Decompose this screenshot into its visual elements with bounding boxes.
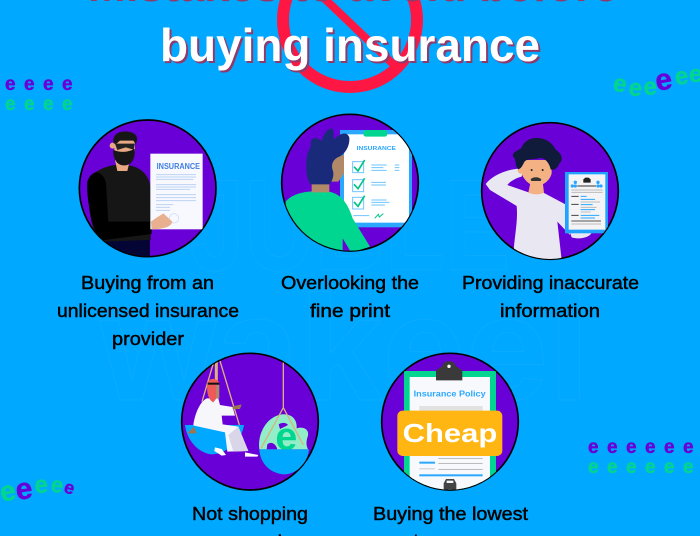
decoration: wavy letters top right: e xyxy=(611,69,629,99)
policy lines xyxy=(419,462,435,464)
title: buying insurance xyxy=(160,19,540,71)
man: robe xyxy=(193,398,248,452)
caption: not shopping around: Not shopping xyxy=(192,504,308,524)
right pan ropes xyxy=(261,408,303,448)
decoration: letter grid top left: e xyxy=(62,94,73,115)
decoration: letter grid bottom right xyxy=(588,437,694,478)
decoration: letter grid bottom right: e xyxy=(645,437,656,458)
caption: fine print: fine print xyxy=(310,301,390,321)
decoration: letter grid bottom right: e xyxy=(664,457,675,478)
icon: cheap insurance policy: Insurance Policy xyxy=(414,388,486,398)
watermark: wakeel xyxy=(99,264,590,432)
hair xyxy=(513,138,562,170)
caption: fine print xyxy=(281,273,419,321)
icon: masked man with unlicensed policy: INSURANCE xyxy=(157,162,201,171)
decoration: letter grid bottom right: e xyxy=(588,457,599,478)
watermark: JUBLE xyxy=(190,152,510,298)
watermark xyxy=(99,152,590,432)
caption: lowest cost coverage: Buying the lowest xyxy=(373,504,528,524)
mask xyxy=(115,144,135,150)
title: buying insurance xyxy=(162,21,542,73)
clipboard xyxy=(340,130,412,227)
face xyxy=(114,140,135,152)
caption: inaccurate information: information xyxy=(500,301,600,321)
neck and face xyxy=(312,184,330,192)
decoration: letter grid top left: e xyxy=(43,74,54,95)
legs xyxy=(106,240,150,256)
decoration: wavy letters top right xyxy=(611,61,700,102)
hair xyxy=(113,131,137,144)
no sign icon xyxy=(283,0,417,87)
icon: man on balance scale xyxy=(182,353,318,490)
pile of money signs xyxy=(259,414,308,449)
shirt and raised arm xyxy=(486,168,570,260)
decoration: wavy letters top right: e xyxy=(673,62,690,91)
decoration: letter grid bottom right: e xyxy=(607,457,618,478)
decoration: letter grid top left: e xyxy=(5,94,16,115)
checklist xyxy=(353,162,364,209)
icon: person reading checklist xyxy=(282,114,418,253)
icon: cheap insurance policy xyxy=(382,353,518,494)
decoration: letter grid bottom right: e xyxy=(664,437,675,458)
head xyxy=(521,160,552,186)
clip xyxy=(436,361,462,380)
sleeve xyxy=(87,172,152,241)
decoration: letter grid top left: e xyxy=(5,74,16,95)
hand xyxy=(570,233,592,238)
caption: unlicensed provider: Buying from an xyxy=(81,273,214,293)
icon: person reading checklist: INSURANCE xyxy=(357,146,396,152)
decoration: letter grid top left: e xyxy=(62,74,73,95)
caption: unlicensed provider: unlicensed insurance xyxy=(57,301,239,321)
decoration: letter grid top left: e xyxy=(24,94,35,115)
caption: not shopping around xyxy=(192,504,308,536)
scale ropes xyxy=(202,361,283,425)
decoration: letter grid bottom right: e xyxy=(683,457,694,478)
policy sheet xyxy=(565,172,608,233)
hair xyxy=(306,129,349,184)
headdress xyxy=(207,379,219,402)
torso xyxy=(88,165,151,242)
decoration: letter grid top left: e xyxy=(43,94,54,115)
caption: inaccurate information xyxy=(462,273,639,321)
hand xyxy=(151,213,172,229)
decoration: wavy letters bottom left xyxy=(0,471,77,508)
mouth xyxy=(531,177,541,181)
neck xyxy=(115,160,130,171)
caption: inaccurate information: Providing inaccurate xyxy=(462,273,639,293)
decoration: letter grid bottom right: e xyxy=(607,437,618,458)
icon: cheap insurance policy: Cheap xyxy=(403,418,497,448)
decoration: letter grid top left xyxy=(5,74,73,115)
body xyxy=(286,191,370,253)
left pan xyxy=(185,425,244,454)
decoration: wavy letters bottom left: e xyxy=(49,471,66,498)
decoration: wavy letters bottom left: e xyxy=(34,471,49,499)
title xyxy=(87,0,618,73)
caption: unlicensed provider xyxy=(57,273,239,349)
decoration: wavy letters top right: e xyxy=(643,73,658,101)
cheap label xyxy=(397,411,502,456)
icon: man on balance scale: e xyxy=(275,414,297,458)
neck xyxy=(528,184,544,194)
caption: fine print: Overlooking the xyxy=(281,273,419,293)
decoration: letter grid bottom right: e xyxy=(588,437,599,458)
decoration: wavy letters top right: e xyxy=(627,74,643,102)
document xyxy=(150,154,203,229)
decoration: wavy letters top right: e xyxy=(652,62,675,98)
decoration: letter grid bottom right: e xyxy=(645,457,656,478)
decoration: letter grid bottom right: e xyxy=(626,457,637,478)
car xyxy=(444,479,456,491)
hand and feet xyxy=(233,404,242,409)
icon: masked man with unlicensed policy xyxy=(79,120,216,258)
decoration: wavy letters bottom left: e xyxy=(62,477,77,499)
decoration: letter grid bottom right: e xyxy=(683,437,694,458)
beard xyxy=(113,149,135,165)
caption: lowest cost coverage xyxy=(373,504,528,536)
decoration: letter grid top left: e xyxy=(24,74,35,95)
right pan xyxy=(259,449,309,474)
caption: unlicensed provider: provider xyxy=(112,329,184,349)
icon: worried man holding policy xyxy=(482,123,618,260)
decoration: letter grid bottom right: e xyxy=(626,437,637,458)
clipboard xyxy=(404,371,496,494)
ear xyxy=(110,143,116,149)
decoration: wavy letters bottom left: e xyxy=(13,472,34,507)
